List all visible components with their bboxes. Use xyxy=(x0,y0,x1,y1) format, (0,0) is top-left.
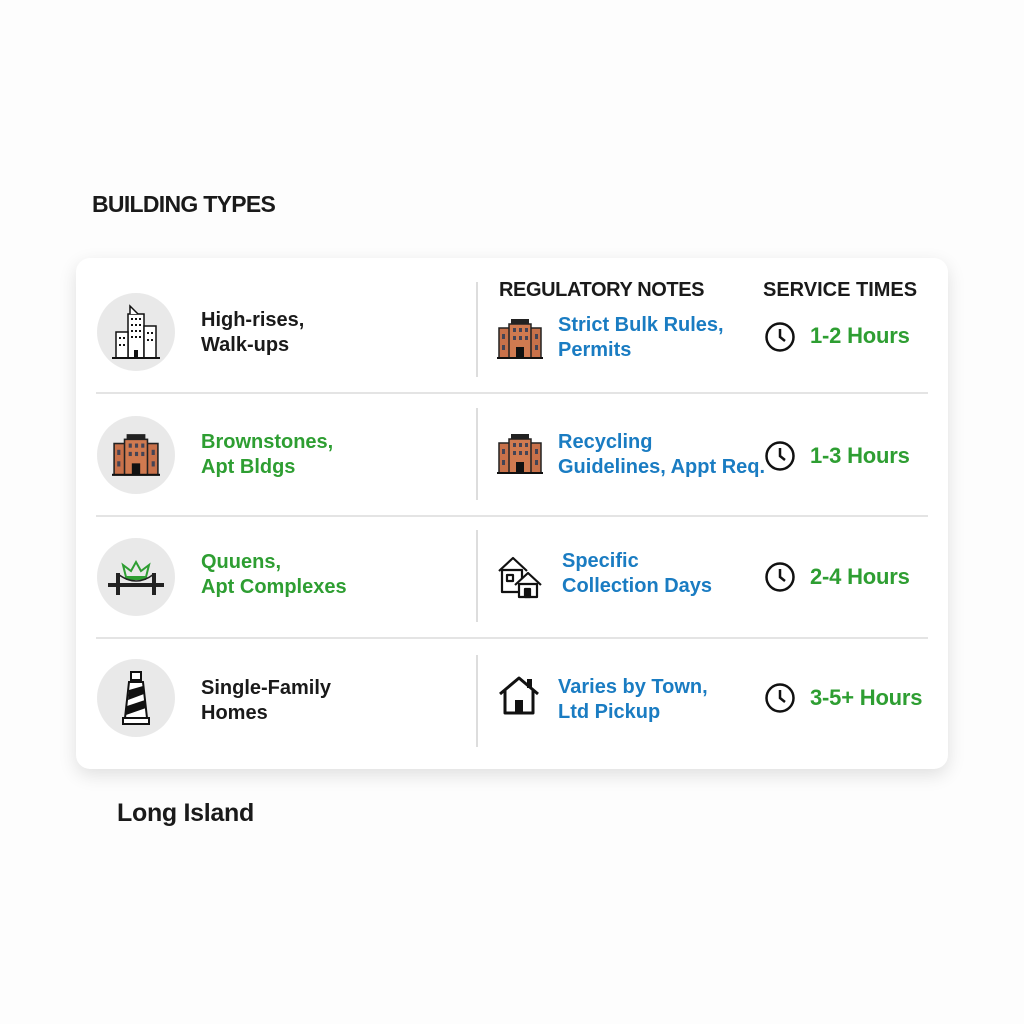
text: single family xyxy=(201,677,331,724)
icon: lighthouse xyxy=(97,659,175,737)
icon: brownstone 2 xyxy=(497,434,543,474)
text: 2-4 hours: 2-4 Hours xyxy=(810,564,910,589)
icon: house xyxy=(499,676,539,714)
text: specific collection xyxy=(562,550,712,597)
text: varies by town xyxy=(558,676,708,723)
text: strict bulk rules: Permits xyxy=(558,339,631,361)
text: queens xyxy=(201,551,347,598)
text: high-rises xyxy=(201,309,304,356)
icon: clock xyxy=(765,441,795,471)
text: recycling: Guidelines, Appt Req. xyxy=(558,456,765,478)
icon: high-rise xyxy=(97,293,175,371)
icon: clock xyxy=(765,322,795,352)
header: regulatory notes: REGULATORY NOTES xyxy=(499,279,704,301)
text: single family: Homes xyxy=(201,702,268,724)
icon: brownstone xyxy=(497,319,543,359)
text: specific collection: Collection Days xyxy=(562,575,712,597)
text: strict bulk rules xyxy=(558,314,724,361)
panel: table card xyxy=(76,258,948,769)
icon: crown bridge xyxy=(97,538,175,616)
text: high-rises: High-rises, xyxy=(201,309,304,331)
text: queens: Quuens, xyxy=(201,551,281,573)
text: 3-5+ hours: 3-5+ Hours xyxy=(810,685,922,710)
text: high-rises: Walk-ups xyxy=(201,334,289,356)
text: 1-2 hours: 1-2 Hours xyxy=(810,323,910,348)
text: strict bulk rules: Strict Bulk Rules, xyxy=(558,314,724,336)
text: varies by town: Ltd Pickup xyxy=(558,701,660,723)
text: recycling: Recycling xyxy=(558,431,652,453)
text: single family: Single-Family xyxy=(201,677,331,699)
text: brownstones: Brownstones, xyxy=(201,431,333,453)
footer label: Long Island xyxy=(117,799,254,827)
icon: clock xyxy=(765,683,795,713)
title: BUILDING TYPES xyxy=(92,191,275,217)
icon: houses xyxy=(498,556,542,598)
header: service times: SERVICE TIMES xyxy=(763,279,917,301)
text: specific collection: Specific xyxy=(562,550,639,572)
text: varies by town: Varies by Town, xyxy=(558,676,708,698)
text: 1-3 hours: 1-3 Hours xyxy=(810,443,910,468)
text: brownstones: Apt Bldgs xyxy=(201,456,295,478)
icon: clock xyxy=(765,562,795,592)
text: brownstones xyxy=(201,431,333,478)
text: queens: Apt Complexes xyxy=(201,576,347,598)
text: recycling xyxy=(558,431,765,478)
icon: brownstone circle xyxy=(97,416,175,494)
